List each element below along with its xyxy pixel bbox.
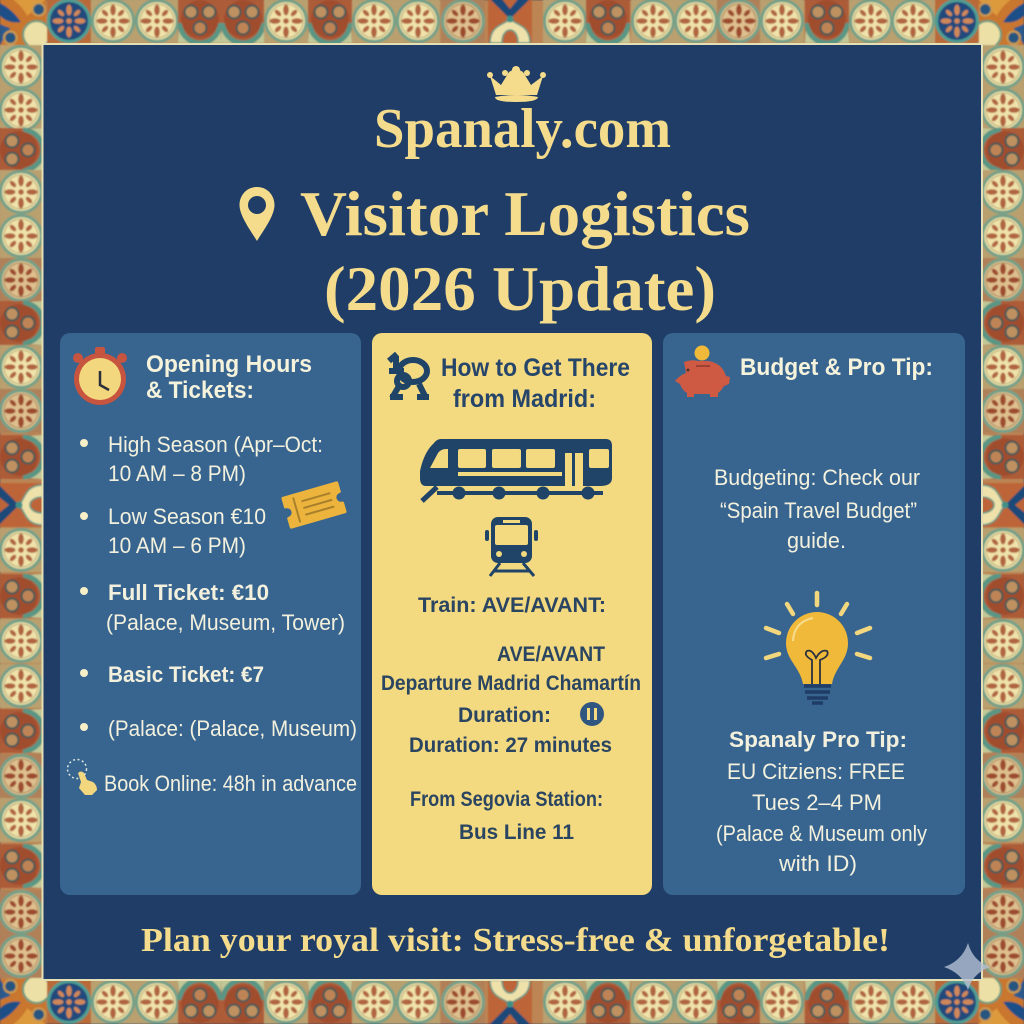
text: bus details: From Segovia Station:	[410, 788, 603, 811]
text: pro tip: Tues 2–4 PM	[752, 790, 882, 815]
text: budgeting note	[714, 465, 920, 553]
icon: transport knot	[389, 354, 429, 398]
text: pro tip: EU Citziens: FREE	[727, 759, 905, 784]
list: hours and ticket prices: Basic Ticket: €7	[108, 662, 264, 687]
text: pro tip: Spanaly Pro Tip:	[729, 727, 907, 752]
heading: how to get there	[441, 354, 630, 413]
title: update year: (2026 Update)	[324, 253, 716, 324]
title: brand: Spanaly.com	[374, 98, 671, 160]
panel: opening hours and tickets	[60, 333, 361, 895]
text: pro tip: (Palace & Museum only	[716, 821, 927, 846]
list: hours and ticket prices: High Season (Apr–Oct:	[108, 432, 323, 457]
text: train details: Departure Madrid Chamartín	[381, 672, 641, 695]
list: hours and ticket prices	[80, 432, 357, 741]
icon: crown	[487, 66, 546, 102]
text: train details	[381, 594, 641, 757]
list: hours and ticket prices: 10 AM – 6 PM)	[108, 533, 246, 558]
icon: high-speed train	[420, 439, 612, 501]
panel: how to get there	[372, 333, 652, 895]
heading: opening hours	[146, 351, 312, 404]
icon: ticket	[283, 483, 345, 527]
icon: small station mark	[580, 702, 604, 726]
text: budgeting note: guide.	[787, 528, 846, 553]
text: budgeting note: Budgeting: Check our	[714, 465, 920, 490]
text: pro tip: with ID)	[778, 851, 857, 876]
icon: piggy bank	[675, 346, 730, 397]
text: train details: Train: AVE/AVANT:	[418, 594, 606, 617]
text: bus details: Bus Line 11	[459, 821, 574, 844]
footer tagline: Plan your royal visit: Stress-free & unforgetable!	[141, 922, 890, 959]
heading: how to get there: from Madrid:	[453, 385, 596, 413]
icon: front train	[485, 517, 538, 576]
list: hours and ticket prices: (Palace: (Palace, Museum)	[108, 716, 357, 741]
icon: stopwatch	[73, 347, 127, 405]
heading: budget and pro tip: Budget & Pro Tip:	[740, 354, 933, 381]
title: visitor logistics: Visitor Logistics	[300, 178, 750, 249]
icon: sparkle	[944, 943, 990, 990]
text: book online: Book Online: 48h in advance	[104, 771, 357, 796]
icon: location pin	[240, 187, 274, 241]
text: train details: AVE/AVANT	[497, 643, 605, 666]
text: budgeting note: “Spain Travel Budget”	[720, 498, 917, 523]
heading: opening hours: Opening Hours	[146, 351, 312, 378]
list: hours and ticket prices: Low Season €10	[108, 504, 266, 529]
panel: budget and pro tip	[663, 333, 965, 895]
heading: opening hours: & Tickets:	[146, 377, 254, 404]
heading: how to get there: How to Get There	[441, 354, 630, 382]
icon: tapping hand	[68, 760, 97, 795]
list: hours and ticket prices: (Palace, Museum, Tower)	[106, 610, 345, 635]
text: train details: Duration:	[458, 704, 551, 727]
text: bus details	[410, 788, 603, 844]
text: pro tip	[716, 727, 927, 876]
icon: light bulb	[766, 593, 870, 703]
text: train details: Duration: 27 minutes	[409, 734, 612, 757]
list: hours and ticket prices: 10 AM – 8 PM)	[108, 461, 246, 486]
list: hours and ticket prices: Full Ticket: €10	[108, 580, 269, 605]
